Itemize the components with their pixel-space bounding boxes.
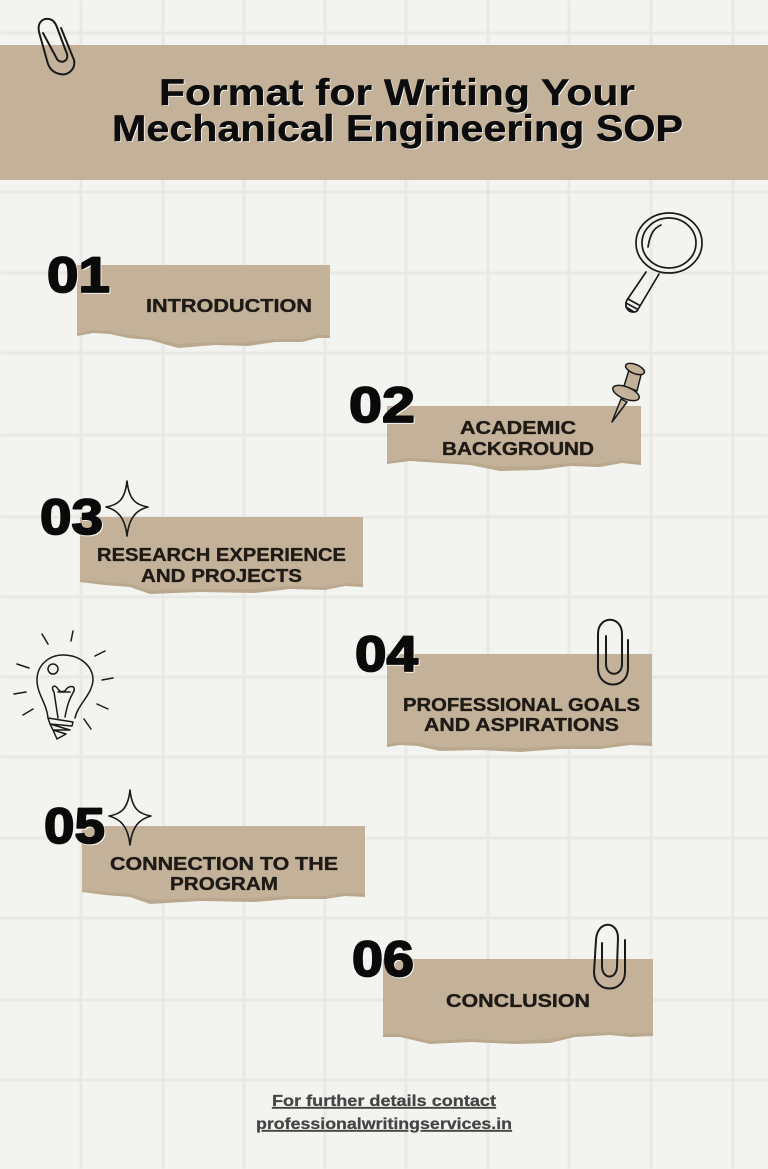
title: Mechanical Engineering SOP	[112, 108, 683, 149]
paper strip	[77, 265, 330, 348]
number: 05	[44, 798, 105, 854]
icon: magnifying glass	[626, 213, 702, 312]
step 01	[47, 247, 330, 348]
label	[442, 418, 594, 459]
paper strip	[383, 959, 653, 1044]
paper strip	[387, 654, 652, 752]
number: 04	[355, 626, 418, 682]
icon: paperclip	[598, 620, 628, 684]
title: Format for Writing Your	[159, 72, 635, 113]
label	[110, 854, 338, 894]
footer contact: professionalwritingservices.in	[256, 1116, 512, 1133]
label: INTRODUCTION	[146, 296, 312, 316]
icon: paperclip	[594, 925, 625, 988]
paper strip	[80, 517, 363, 594]
label: AND ASPIRATIONS	[424, 715, 619, 735]
icon: paperclip top	[39, 19, 74, 74]
number: 06	[352, 931, 414, 987]
label: CONNECTION TO THE	[110, 854, 338, 874]
number: 03	[40, 489, 103, 545]
paper strip	[387, 406, 641, 471]
title: Mechanical Engineering SOP	[113, 109, 684, 150]
label: RESEARCH EXPERIENCE	[97, 545, 346, 565]
step 03	[40, 481, 363, 594]
label: BACKGROUND	[442, 439, 594, 459]
label	[97, 545, 346, 586]
step 02	[349, 361, 646, 471]
icon: push pin	[611, 361, 646, 422]
icon: sparkle	[109, 790, 151, 845]
label: PROGRAM	[170, 874, 278, 894]
label: CONCLUSION	[446, 991, 590, 1011]
number: 01	[47, 247, 110, 303]
label: ACADEMIC	[460, 418, 576, 438]
header banner	[0, 45, 768, 180]
icon: light bulb	[14, 631, 113, 739]
title: Format for Writing Your	[160, 73, 636, 114]
number: 02	[349, 377, 415, 433]
footer contact: For further details contact	[272, 1093, 497, 1110]
label	[403, 695, 640, 735]
label: PROFESSIONAL GOALS	[403, 695, 640, 715]
paper strip	[82, 826, 365, 904]
label: AND PROJECTS	[141, 566, 302, 586]
title	[112, 72, 684, 150]
step 06	[352, 925, 653, 1044]
icon: sparkle	[106, 481, 148, 536]
step 05	[44, 790, 365, 904]
step 04	[355, 620, 652, 752]
footer contact	[256, 1093, 512, 1133]
